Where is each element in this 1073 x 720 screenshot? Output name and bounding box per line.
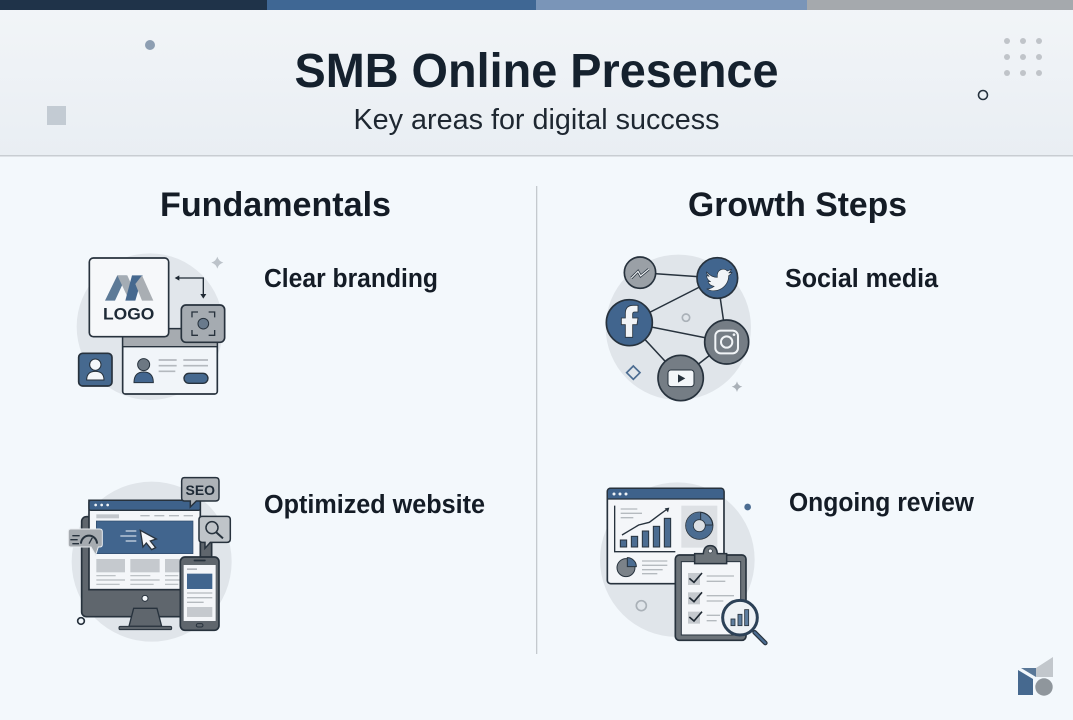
icon: website: SEO — [186, 482, 215, 498]
label: Ongoing review: Ongoing review — [789, 489, 974, 517]
icon: branding — [77, 253, 225, 400]
icon: review dashboard — [600, 482, 765, 643]
header decorations — [47, 38, 1042, 125]
column divider — [536, 186, 537, 654]
icon: social network — [606, 255, 751, 401]
heading: Growth Steps: Growth Steps — [688, 186, 907, 224]
label: Clear branding: Clear branding — [264, 265, 438, 293]
label: Optimized website: Optimized website — [264, 491, 485, 519]
header band — [0, 0, 1073, 156]
title: SMB Online Presence — [294, 45, 778, 98]
subtitle: Key areas for digital success — [354, 104, 720, 136]
label: Social media: Social media — [785, 265, 939, 293]
icon: website — [68, 478, 232, 642]
icon: branding: LOGO — [103, 304, 154, 323]
heading: Fundamentals: Fundamentals — [160, 186, 391, 224]
top colour bar — [0, 0, 1073, 10]
corner logo mark — [1018, 657, 1053, 696]
